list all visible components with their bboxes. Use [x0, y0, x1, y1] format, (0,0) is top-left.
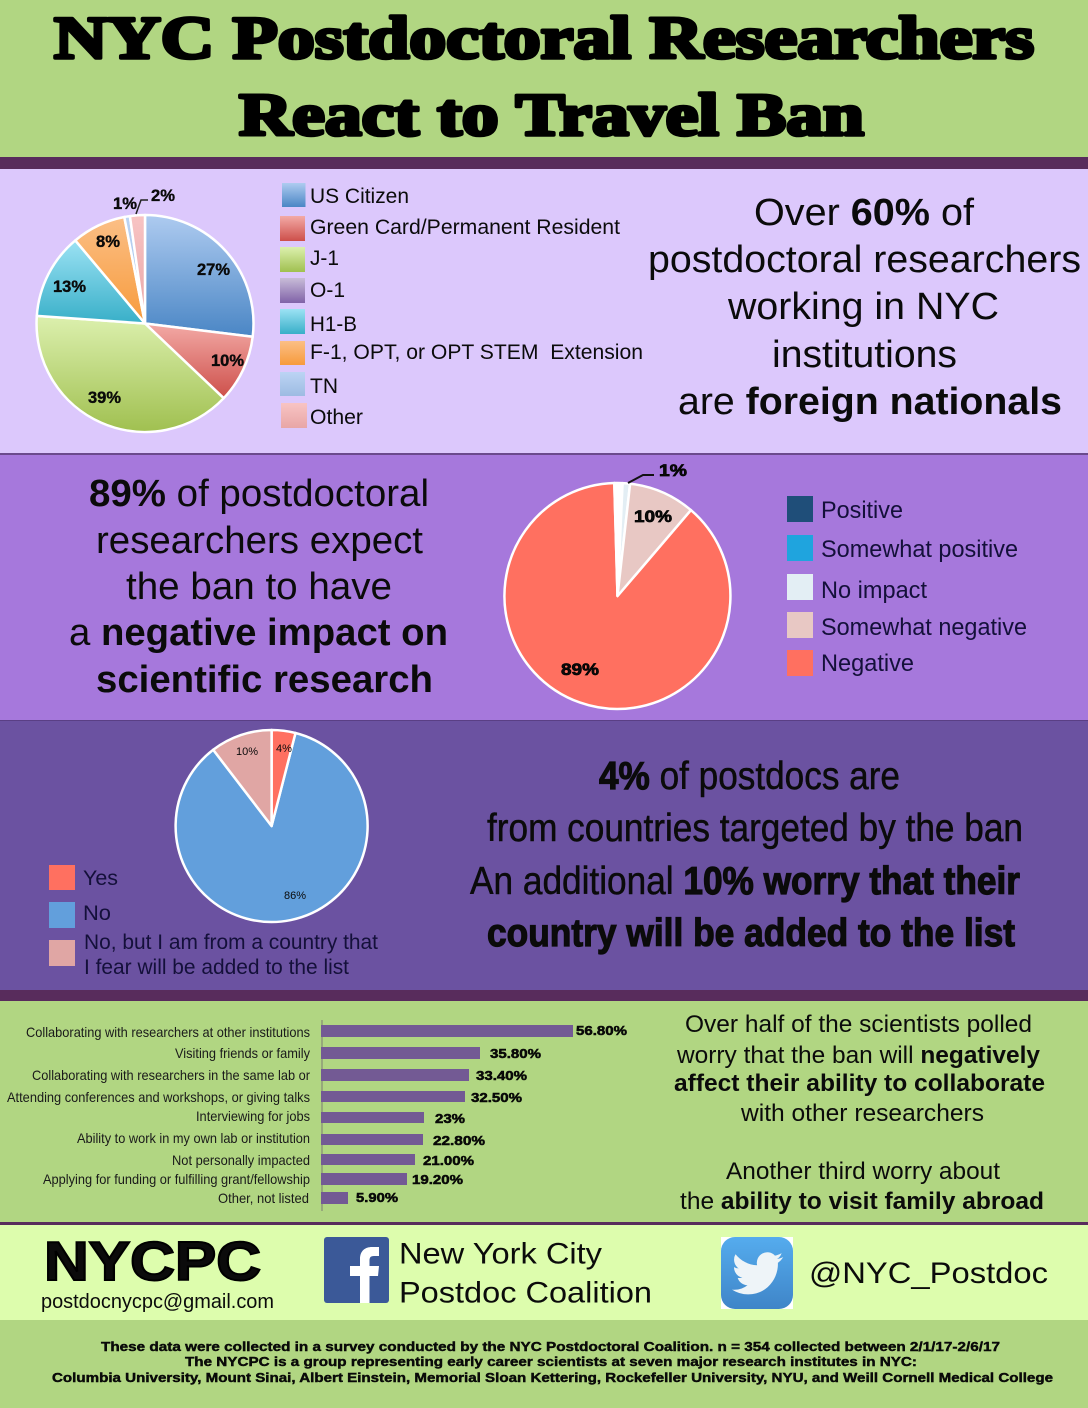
text block: targeted countries: country will be added to the list [487, 912, 1015, 955]
bar values: 32.50% [471, 1090, 523, 1105]
bar labels: Collaborating with researchers in the same lab or [32, 1067, 310, 1083]
text block: collaboration worries [674, 1011, 1045, 1215]
bar values: 56.80% [576, 1023, 628, 1038]
text block: collaboration worries: Another third worry about [726, 1158, 1000, 1185]
pie labels: 2% [151, 186, 175, 205]
facebook name: New York City [399, 1238, 602, 1270]
pie labels [561, 462, 687, 679]
legend: expected impact: Somewhat positive [821, 536, 1018, 563]
twitter handle: @NYC_Postdoc [809, 1257, 1048, 1290]
text block: foreign nationals: postdoctoral researchers [648, 239, 1081, 281]
text block: negative impact: scientific research [96, 659, 433, 701]
bar chart: activities impacted [7, 1020, 628, 1211]
facebook name: Postdoc Coalition [399, 1276, 652, 1310]
panel: personal impact [0, 1001, 1088, 1222]
pie labels: 13% [53, 277, 86, 296]
text block: negative impact: the ban to have [126, 566, 392, 608]
panel: contact [0, 1225, 1088, 1320]
text block: collaboration worries: with other researchers [740, 1100, 984, 1127]
pie labels: 10% [236, 746, 258, 758]
text block: collaboration worries: affect their ability to collaborate [674, 1070, 1045, 1097]
bar values: 23% [435, 1111, 465, 1126]
pie labels: 1% [113, 194, 137, 213]
pie labels: 1% [659, 462, 687, 480]
pie labels: 10% [634, 508, 672, 526]
survey note line 3: Columbia University, Mount Sinai, Albert Einstein, Memorial Sloan Kettering, Rockefeller University, NYU, and Weill Cornell Medical College [52, 1370, 1053, 1385]
bar labels: Collaborating with researchers at other institutions [26, 1024, 310, 1040]
legend: visa status: TN [310, 375, 338, 398]
legend: visa status: Other [310, 406, 363, 429]
text block: targeted countries: 4% of postdocs are [599, 755, 900, 798]
text block: foreign nationals: working in NYC [727, 286, 999, 328]
text block: collaboration worries: Over half of the scientists polled [685, 1011, 1032, 1038]
text block: targeted countries: An additional 10% worry that their [470, 860, 1020, 903]
text block: foreign nationals [648, 192, 1081, 423]
bar labels: Other, not listed [218, 1190, 309, 1206]
bar labels: Visiting friends or family [175, 1045, 310, 1061]
legend: visa status: J-1 [310, 247, 339, 270]
pie labels: 4% [276, 743, 292, 755]
legend: expected impact: Somewhat negative [821, 614, 1027, 641]
text block: targeted countries [470, 755, 1023, 955]
bar values: 35.80% [490, 1046, 542, 1061]
pie labels: 89% [561, 661, 599, 679]
facebook name [399, 1238, 652, 1310]
legend: expected impact: Negative [821, 650, 914, 677]
pie labels: 10% [211, 351, 244, 370]
legend: visa status: US Citizen [310, 185, 409, 208]
email: postdocnycpc@gmail.com [41, 1291, 274, 1313]
legend: targeted countries: Yes [83, 867, 118, 890]
panel: targeted countries [0, 721, 1088, 990]
pie labels: 8% [96, 232, 120, 251]
panel: impact on research [0, 455, 1088, 720]
legend: expected impact: No impact [821, 577, 927, 604]
pie chart: expected impact [504, 483, 730, 709]
bar values [356, 1023, 628, 1205]
legend: targeted countries: I fear will be added to the list [84, 956, 349, 979]
bar labels: Not personally impacted [172, 1152, 310, 1168]
text block: negative impact: researchers expect [96, 520, 423, 562]
legend: visa status: H1-B [310, 313, 357, 336]
bar labels: Ability to work in my own lab or institution [77, 1130, 310, 1146]
bar values: 22.80% [433, 1133, 486, 1148]
bar labels [7, 1024, 310, 1206]
legend: expected impact: Positive [821, 497, 903, 524]
text block: collaboration worries: the ability to visit family abroad [680, 1188, 1044, 1215]
bar labels: Interviewing for jobs [196, 1108, 310, 1124]
bar labels: Applying for funding or fulfilling grant/fellowship [43, 1171, 310, 1187]
title line 1: NYC Postdoctoral Researchers [54, 5, 1034, 71]
text block: foreign nationals: Over 60% of [754, 192, 974, 234]
legend: targeted countries [49, 865, 378, 979]
icon: twitter [721, 1237, 793, 1309]
survey note line 2: The NYCPC is a group representing early career scientists at seven major research institutes in NYC: [185, 1354, 917, 1369]
text block: foreign nationals: are foreign nationals [678, 381, 1062, 423]
legend: targeted countries: No, but I am from a country that [84, 931, 378, 954]
bar values: 5.90% [356, 1190, 398, 1205]
panel: footer [0, 1320, 1088, 1408]
pie labels [53, 186, 244, 407]
text block: negative impact: 89% of postdoctoral [89, 473, 429, 515]
pie labels: 86% [284, 890, 306, 902]
legend: expected impact [787, 496, 1027, 677]
bar values: 33.40% [476, 1068, 528, 1083]
panel: visa status [0, 169, 1088, 453]
legend: visa status: Green Card/Permanent Resident [310, 216, 620, 239]
text block: collaboration worries: worry that the ban will negatively [676, 1042, 1041, 1069]
text block: targeted countries: from countries targeted by the ban [487, 807, 1023, 850]
pie labels: 39% [88, 388, 121, 407]
title line 2: React to Travel Ban [239, 82, 864, 148]
text block: negative impact: a negative impact on [69, 612, 448, 654]
survey note line 1: These data were collected in a survey conducted by the NYC Postdoctoral Coalition. n = 354 collected between 2/1/17-2/6/17 [101, 1339, 1000, 1354]
pie labels [236, 743, 306, 902]
legend: visa status: O-1 [310, 279, 345, 302]
bar labels: Attending conferences and workshops, or giving talks [7, 1089, 310, 1105]
bar values: 19.20% [412, 1172, 464, 1187]
panel: title [0, 0, 1088, 157]
legend: visa status [280, 183, 643, 429]
logo: NYCPC: NYCPC [44, 1230, 261, 1292]
icon: facebook [324, 1237, 389, 1303]
legend: targeted countries: No [83, 902, 111, 925]
text block: foreign nationals: institutions [772, 334, 957, 376]
pie chart: visa status [37, 215, 254, 432]
bar values: 21.00% [423, 1153, 475, 1168]
pie labels: 27% [197, 260, 230, 279]
text block: negative impact [69, 473, 448, 701]
pie chart: targeted countries [176, 730, 368, 922]
legend: visa status: F-1, OPT, or OPT STEM Extension [310, 341, 643, 364]
